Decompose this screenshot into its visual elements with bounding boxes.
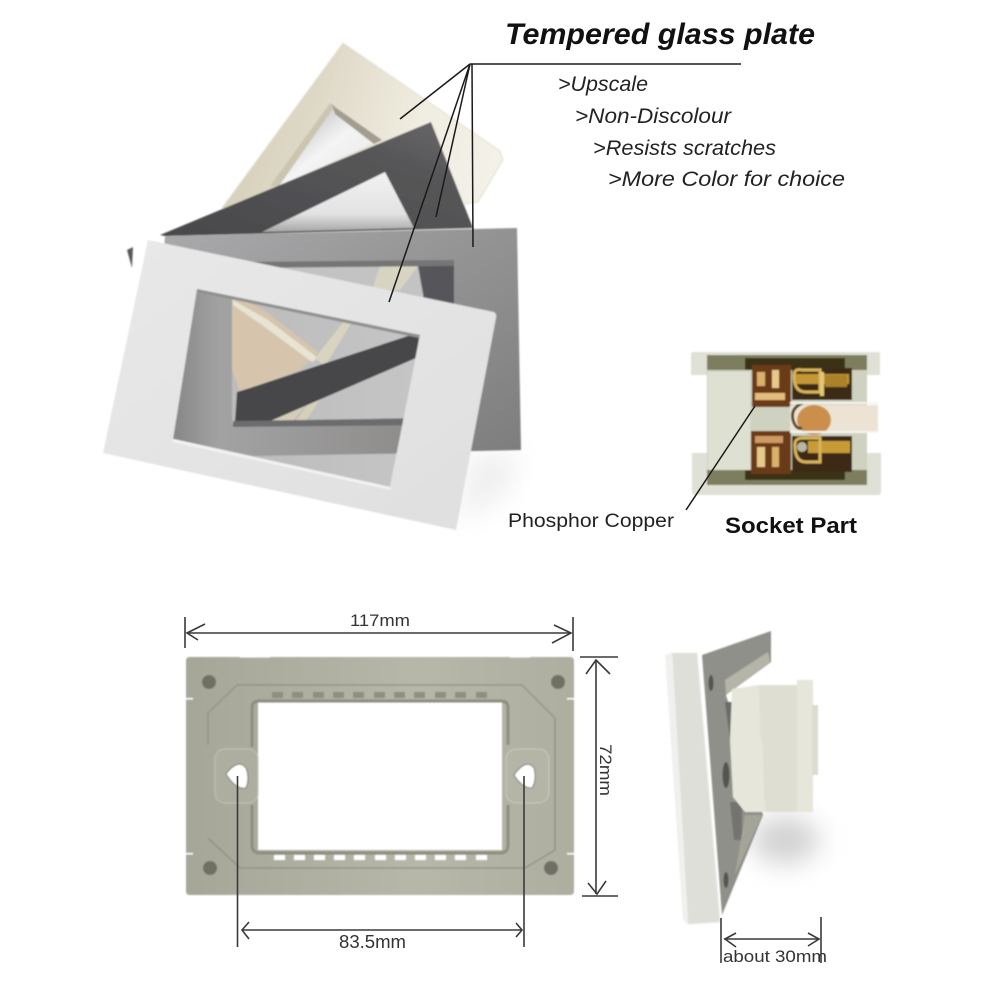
dimension: 72mm height xyxy=(580,657,618,896)
mounting plate body xyxy=(186,657,574,895)
label: Socket Part: Socket Part xyxy=(725,513,858,538)
illustration: socket part internals xyxy=(691,352,881,495)
dimension: about 30mm depth xyxy=(721,917,827,966)
title: Tempered glass plate: Tempered glass plate xyxy=(505,18,815,51)
brass terminal: bottom xyxy=(792,436,852,472)
soft shadow under the assembled socket xyxy=(751,816,819,864)
feature: Resists scratches: >Resists scratches xyxy=(593,137,777,160)
front plate edge xyxy=(672,653,720,924)
copper contact: lower left xyxy=(751,431,791,474)
dimension: 117mm width: 117mm xyxy=(350,611,410,630)
edge notches xyxy=(186,656,574,854)
dimension: 72mm height: 72mm xyxy=(596,744,615,796)
view through the white plate opening xyxy=(172,292,420,488)
raised inner ridge xyxy=(208,685,555,868)
leader lines from the glass plates to the title xyxy=(389,64,741,302)
white glass plate xyxy=(103,240,496,530)
feature: Non-Discolour: >Non-Discolour xyxy=(575,105,732,128)
dimension: 117mm width xyxy=(185,611,573,651)
champagne glass plate xyxy=(222,43,503,240)
bottom slots xyxy=(274,855,487,860)
support plate xyxy=(702,631,771,915)
module block rear xyxy=(759,680,818,812)
top slots xyxy=(272,692,487,698)
mid grey glass plate xyxy=(160,228,521,456)
dimension: 83.5mm hole spacing: 83.5mm xyxy=(339,932,406,952)
label: Phosphor Copper: Phosphor Copper xyxy=(508,511,675,532)
dark grey glass plate xyxy=(127,122,473,268)
feature list xyxy=(558,73,845,191)
dimension: about 30mm depth: about 30mm xyxy=(723,947,827,966)
dimension: 83.5mm hole spacing xyxy=(238,776,524,952)
feature: More Color for choice: >More Color for choice xyxy=(608,168,845,191)
illustration: side view of assembled socket xyxy=(665,631,818,924)
illustration: mounting plate, back view xyxy=(186,656,574,895)
socket housing xyxy=(691,352,881,495)
feature: Upscale: >Upscale xyxy=(558,73,648,96)
brass terminal: top xyxy=(792,368,852,400)
copper contact: upper left xyxy=(752,365,791,407)
left mounting ear xyxy=(215,749,258,803)
illustration: stacked tempered glass plates xyxy=(103,43,521,530)
inner lip around the opening xyxy=(252,701,508,853)
brass terminal: middle xyxy=(790,402,878,435)
module clamp xyxy=(730,685,766,812)
leader line to phosphor copper xyxy=(686,406,755,510)
corner screw holes xyxy=(202,675,565,875)
soft shadow under the plates xyxy=(458,452,522,525)
right mounting ear xyxy=(506,749,549,803)
socket interior xyxy=(707,355,867,485)
